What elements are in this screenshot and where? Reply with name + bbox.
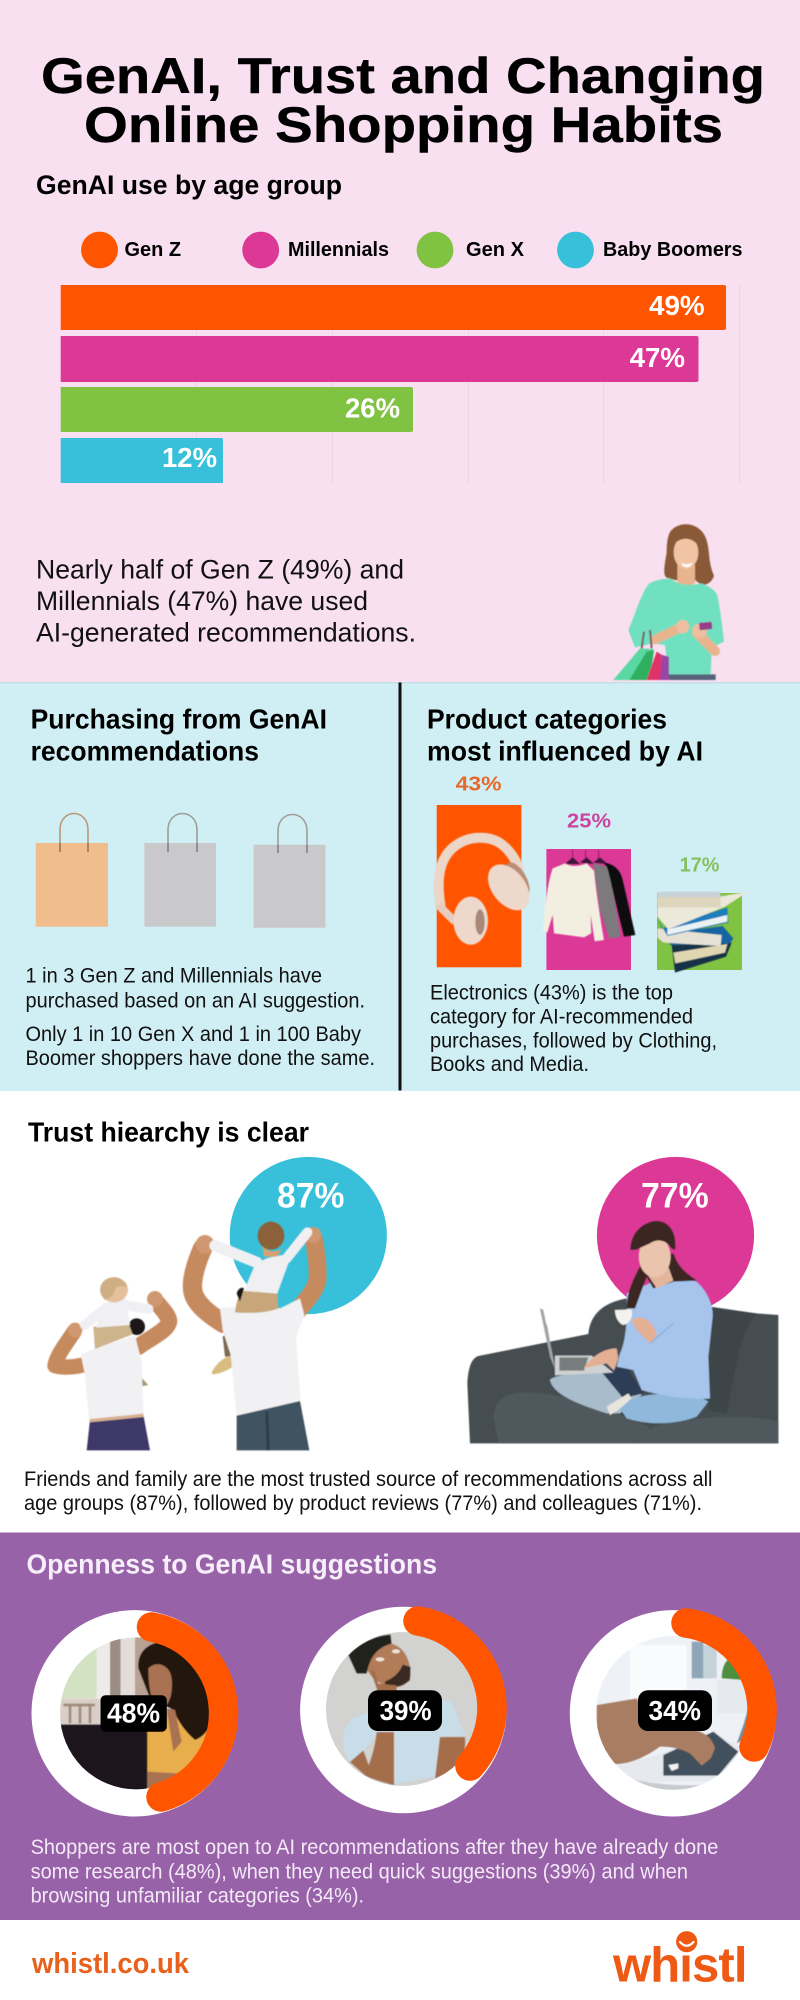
logo: whistl: whistl [612, 1939, 748, 1993]
bar: Gen Z 49%: 49% [649, 290, 705, 321]
text: electronics: purchases, followed by Clothing, [430, 1030, 717, 1053]
icon: woman with shopping bags and phone [613, 524, 724, 680]
text: shoppers most open: some research (48%), when they need quick suggestions (39%) and when [31, 1860, 688, 1883]
icon: sweaters on hangers [543, 850, 635, 941]
legend item: Gen X [417, 232, 525, 268]
icon: stack of books [657, 892, 748, 973]
legend item: Gen X: Gen X [466, 239, 525, 261]
donut: 39% quick suggestions [300, 1607, 506, 1813]
orange arc [686, 1623, 762, 1747]
heading: Purchasing from GenAI recommendations: recommendations [31, 736, 259, 767]
stat circle: 77%: 77% [641, 1176, 709, 1215]
bar: Baby Boomers 12%: 12% [162, 442, 217, 473]
text: shoppers most open [31, 1836, 718, 1907]
text: nearly half: AI-generated recommendations. [36, 618, 416, 648]
bar: Gen X 26%: 26% [345, 392, 400, 423]
label: 39% [368, 1690, 442, 1731]
photo: woman at laptop [57, 1635, 217, 1792]
legend [81, 232, 743, 268]
heading: Purchasing from GenAI recommendations [31, 704, 327, 767]
bar: Millennials 47% [61, 336, 698, 382]
photo: thinking man [323, 1629, 483, 1789]
text: friends and family [24, 1468, 712, 1515]
heading: Product categories most influenced by AI: Product categories [427, 704, 667, 735]
text: friends and family: age groups (87%), followed by product reviews (77%) and colleagues (71%). [24, 1492, 702, 1515]
photo: hands typing on laptop [593, 1635, 753, 1792]
divider [398, 682, 402, 1090]
website link text: whistl.co.uk [31, 1948, 190, 1980]
bar: Gen Z 49% [61, 285, 726, 330]
text: electronics [430, 981, 717, 1076]
text: nearly half: Millennials (47%) have used [36, 586, 368, 616]
heading: Purchasing from GenAI recommendations: Purchasing from GenAI [31, 704, 327, 735]
legend item: Baby Boomers: Baby Boomers [603, 239, 742, 261]
chart: clothing 25% [543, 811, 635, 970]
bar: Baby Boomers 12% [61, 438, 223, 483]
text: shoppers most open: browsing unfamiliar categories (34%). [31, 1884, 364, 1907]
donut: 48% research [32, 1610, 238, 1817]
panel: footer [0, 1920, 800, 2000]
text: purchasing stats: 1 in 3 Gen Z and Millennials have [26, 965, 322, 988]
bar: Millennials 47%: 47% [630, 342, 685, 373]
stat circle: 87%: 87% [277, 1176, 344, 1215]
text: electronics: category for AI-recommended [430, 1005, 693, 1028]
stat circle: 77% [597, 1157, 754, 1314]
bar chart [61, 285, 739, 483]
panel: Trust hierarchy [0, 1091, 800, 1532]
chart: electronics 43% [437, 773, 538, 967]
legend item: Millennials: Millennials [288, 239, 389, 261]
text: nearly half: Nearly half of Gen Z (49%) and [36, 555, 404, 585]
chart: clothing 25%: 25% [567, 811, 611, 833]
panel: Purchasing and product categories [0, 682, 800, 1091]
icon: grey shopping bag [254, 814, 326, 928]
text: purchasing stats [26, 965, 375, 1070]
panel: GenAI use by age group [0, 0, 800, 682]
text: shoppers most open: Shoppers are most open to AI recommendations after they have already done [31, 1836, 718, 1859]
legend item: Millennials [242, 232, 389, 268]
label: 34%: 34% [648, 1695, 701, 1726]
label: 34% [638, 1690, 712, 1731]
icon: orange shopping bag [36, 814, 108, 927]
panel: Openness to GenAI suggestions [0, 1532, 800, 1920]
legend item: Gen Z: Gen Z [124, 239, 181, 261]
title: GenAI, Trust and Changing [41, 48, 765, 104]
legend item: Baby Boomers [557, 232, 742, 268]
chart: books 17%: 17% [680, 855, 720, 877]
icon: grey shopping bag [144, 814, 216, 927]
text: purchasing stats: Only 1 in 10 Gen X and 1 in 100 Baby [26, 1023, 361, 1046]
image: fathers carrying children on shoulders [55, 1222, 321, 1450]
heading: Openness to GenAI suggestions: Openness to GenAI suggestions [26, 1548, 437, 1579]
heading: Product categories most influenced by AI: most influenced by AI [427, 736, 703, 767]
image: woman on sofa with laptop and cup [467, 1221, 778, 1443]
label: 48%: 48% [107, 1698, 160, 1729]
label: 39%: 39% [380, 1695, 432, 1726]
stat circle: 87% [230, 1157, 387, 1314]
text: electronics: Books and Media. [430, 1053, 589, 1076]
donut: 34% browsing [570, 1610, 776, 1817]
legend item: Gen Z [81, 232, 181, 268]
orange arc [418, 1621, 492, 1766]
title: Online Shopping Habits [84, 97, 723, 153]
orange arc [152, 1627, 224, 1797]
text: electronics: Electronics (43%) is the top [430, 981, 673, 1004]
icon: headphones [438, 838, 538, 945]
text: nearly half [36, 555, 416, 648]
chart: books 17% [657, 855, 748, 973]
text: friends and family: Friends and family are the most trusted source of recommendations across all [24, 1468, 712, 1491]
text: purchasing stats: Boomer shoppers have done the same. [26, 1047, 375, 1070]
text: purchasing stats: purchased based on an AI suggestion. [26, 989, 365, 1012]
heading: Product categories most influenced by AI [427, 704, 703, 767]
heading: GenAI use by age group: GenAI use by age group [36, 170, 342, 200]
title [41, 48, 765, 153]
heading: Trust hiearchy is clear: Trust hiearchy is clear [28, 1117, 309, 1148]
chart: electronics 43%: 43% [456, 773, 502, 795]
bar: Gen X 26% [61, 387, 413, 432]
